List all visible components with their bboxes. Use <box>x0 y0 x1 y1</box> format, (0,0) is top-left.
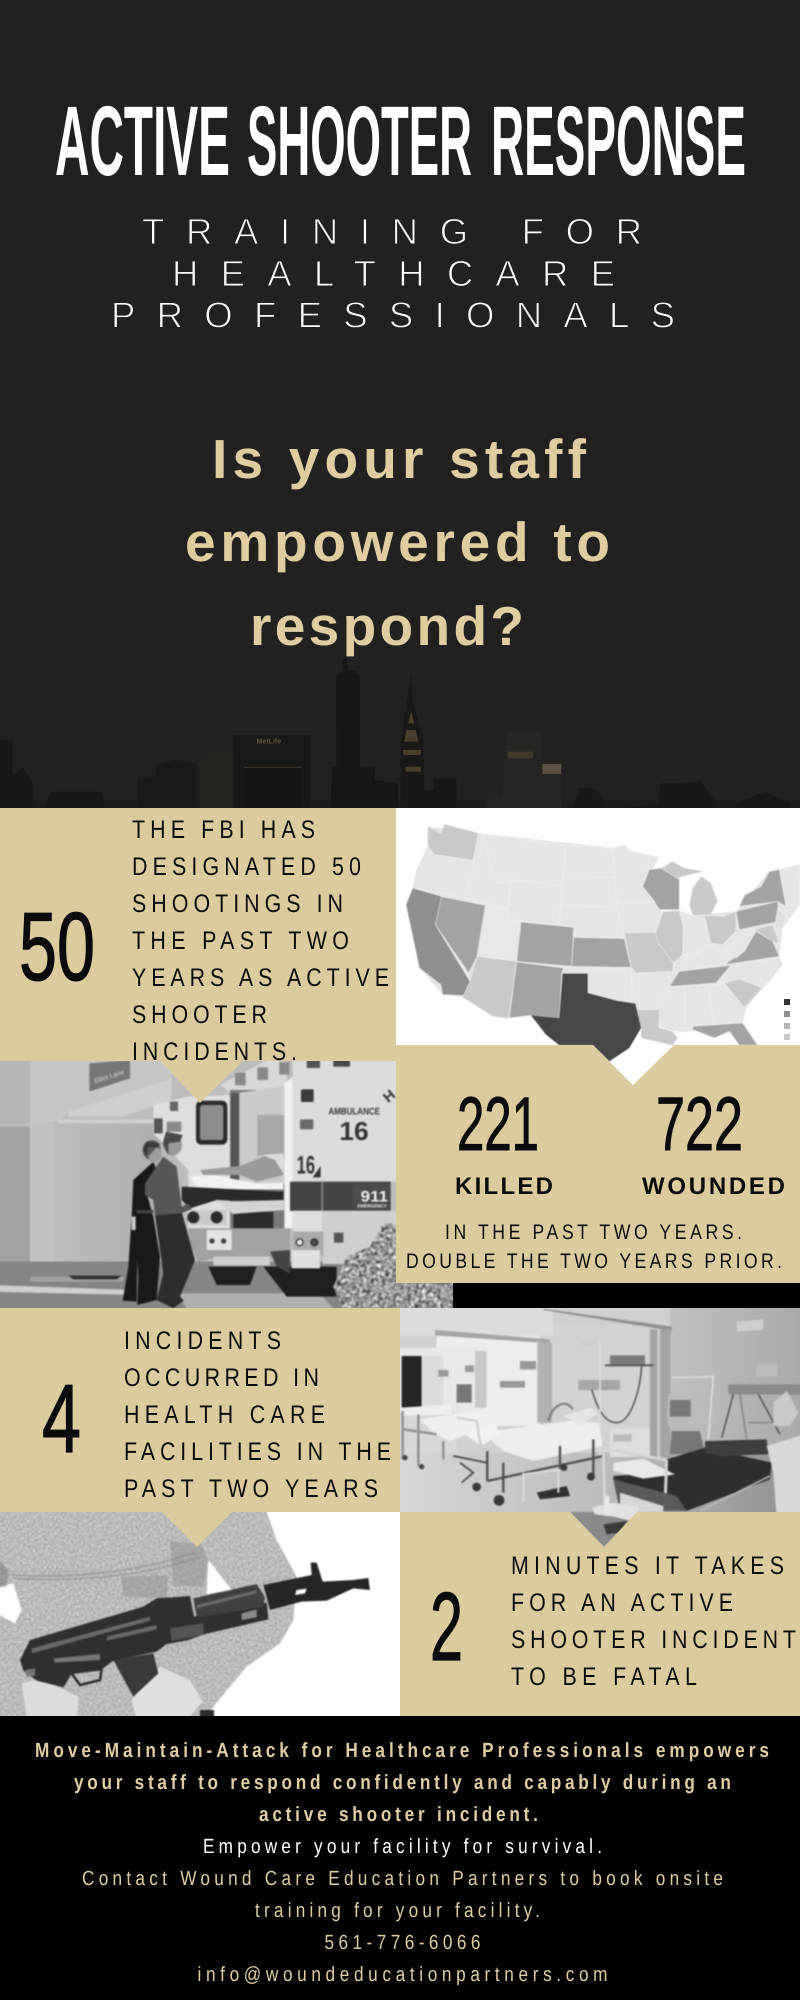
stretcher and patient <box>190 1175 283 1189</box>
stat text: OCCURRED IN <box>124 1364 319 1392</box>
skyline silhouette <box>0 658 800 808</box>
stat: killed <box>455 1082 553 1200</box>
skyline silhouette: MetLife <box>257 737 281 745</box>
ambulance labels: AMBULANCE <box>328 1106 380 1117</box>
panel: ambulance photo: EMERGENCY <box>357 1203 387 1209</box>
arrow: tan pointer into ambulance photo <box>160 1061 243 1103</box>
question heading <box>185 428 610 657</box>
hands <box>21 1680 79 1716</box>
stat text <box>511 1552 796 1691</box>
panel: four incidents stat <box>0 1308 400 1512</box>
panel: ambulance photo <box>0 1061 453 1308</box>
stat text: PAST TWO YEARS <box>124 1475 378 1503</box>
bold pitch <box>35 1739 769 1826</box>
rifle <box>20 1596 268 1687</box>
stat text: FACILITIES IN THE <box>124 1438 391 1466</box>
stat: killed: KILLED <box>455 1173 553 1200</box>
panel: header with skyline <box>0 0 800 808</box>
two paramedics <box>123 1162 160 1305</box>
panel: footer call to action <box>0 1716 800 2000</box>
question heading: respond? <box>250 595 524 657</box>
bold pitch: Move-Maintain-Attack for Healthcare Professionals empowers <box>35 1739 769 1762</box>
subtitle: PROFESSIONALS <box>111 294 675 336</box>
contact details: info@woundeducationpartners.com <box>198 1963 608 1986</box>
stat text: SHOOTER <box>132 1001 267 1029</box>
bush <box>332 1222 453 1308</box>
panel: ambulance photo: Elliot Lane <box>93 1068 125 1085</box>
stat: killed: 221 <box>457 1082 539 1167</box>
panel: map of shootings <box>396 808 800 1088</box>
stat: wounded <box>642 1082 785 1200</box>
contact details: Contact Wound Care Education Partners to book onsite <box>82 1867 723 1890</box>
stat text: TO BE FATAL <box>511 1663 697 1691</box>
tagline: Empower your facility for survival. <box>203 1835 602 1858</box>
subtitle: HEALTHCARE <box>172 253 615 294</box>
subtitle <box>111 211 675 336</box>
stat text: HEALTH CARE <box>124 1401 325 1429</box>
contact details: training for your facility. <box>255 1899 540 1922</box>
map legend <box>784 999 790 1040</box>
right bed <box>613 1448 772 1511</box>
sweater <box>0 1503 297 1723</box>
contact details: 561-776-6066 <box>324 1931 480 1954</box>
stat: wounded: 722 <box>656 1082 743 1167</box>
cart in pointer <box>570 1512 629 1547</box>
stat text <box>132 816 389 1066</box>
stat text: SHOOTINGS IN <box>132 890 343 918</box>
caption <box>406 1221 782 1273</box>
panel: hospital room photo <box>400 1308 800 1547</box>
stat text: INCIDENTS <box>124 1327 281 1355</box>
stat text: THE FBI HAS <box>132 816 315 844</box>
stat text: INCIDENTS. <box>132 1038 297 1066</box>
stat text: THE PAST TWO <box>132 927 349 955</box>
panel: fifty shootings stat <box>0 808 396 1066</box>
stat text: SHOOTER INCIDENT <box>511 1626 796 1654</box>
subtitle: TRAINING FOR <box>142 211 642 252</box>
stat text: FOR AN ACTIVE <box>511 1589 733 1617</box>
panel: ambulance photo: H <box>380 1087 398 1106</box>
panel: ambulance photo: 16 <box>339 1116 369 1146</box>
question heading: Is your staff <box>212 428 587 490</box>
number 4: 4 <box>42 1364 81 1473</box>
left bed <box>402 1405 486 1441</box>
stat: wounded: WOUNDED <box>642 1173 785 1200</box>
contact details <box>82 1867 723 1986</box>
title: SHOOTER <box>247 85 472 196</box>
caption: IN THE PAST TWO YEARS. <box>445 1221 742 1244</box>
bold pitch: your staff to respond confidently and capably during an <box>74 1771 731 1794</box>
stat text <box>124 1327 391 1503</box>
title: ACTIVE <box>55 85 230 196</box>
question heading: empowered to <box>185 511 610 573</box>
black gap strip <box>453 1283 800 1308</box>
center bed <box>548 1404 573 1421</box>
stat text: YEARS AS ACTIVE <box>132 964 389 992</box>
panel: ambulance photo: 16 <box>297 1151 315 1179</box>
caption: DOUBLE THE TWO YEARS PRIOR. <box>406 1250 782 1273</box>
bold pitch: active shooter incident. <box>259 1803 538 1826</box>
number 2: 2 <box>430 1572 463 1681</box>
number 50: 50 <box>19 892 95 1001</box>
panel: rifle photo <box>0 1503 400 1723</box>
ambulance body <box>208 1267 337 1297</box>
panel: killed and wounded stats <box>396 1045 800 1283</box>
stat text: DESIGNATED 50 <box>132 853 361 881</box>
arrow: tan pointer into rifle photo <box>162 1512 232 1547</box>
panel: ambulance photo: 911 <box>361 1187 388 1205</box>
stat text: MINUTES IT TAKES <box>511 1552 784 1580</box>
panel: two minutes stat <box>400 1512 800 1716</box>
